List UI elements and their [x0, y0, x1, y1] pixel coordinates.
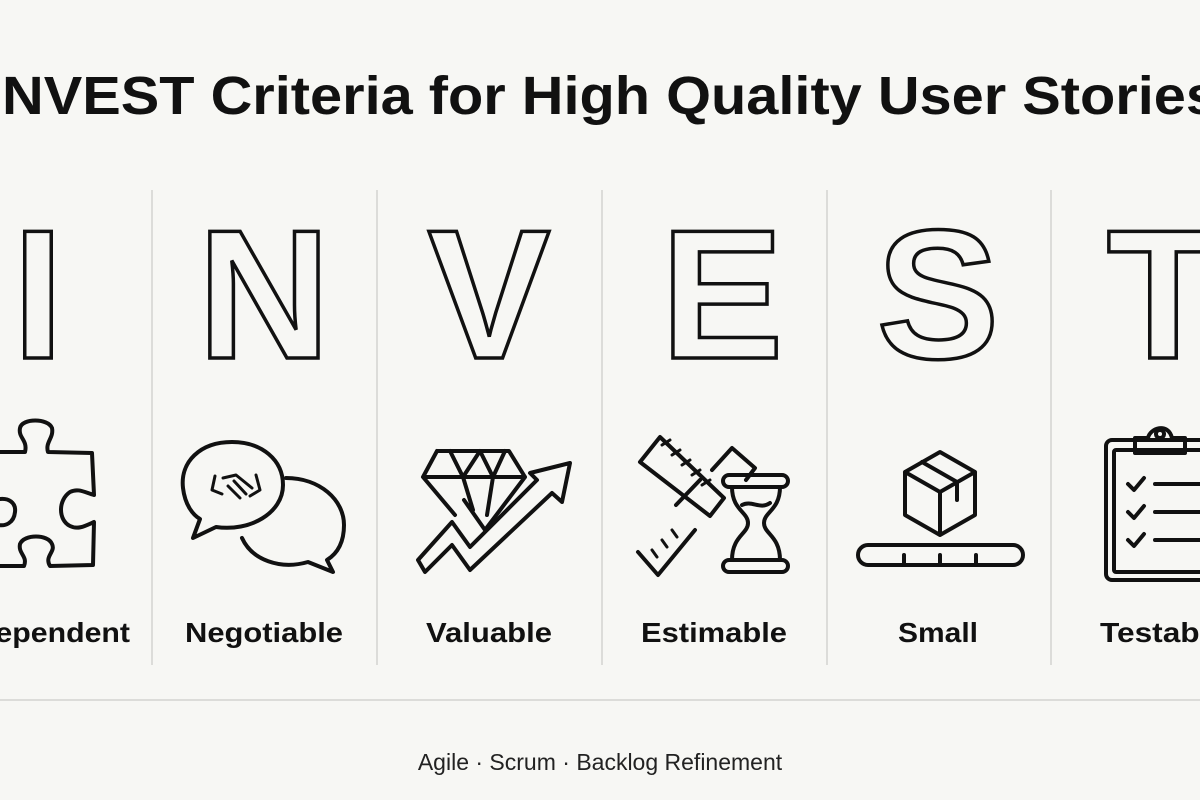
big outlined letters: I: [12, 191, 64, 397]
big outlined letters: S: [877, 191, 999, 397]
big outlined letters: [12, 191, 1200, 397]
icon: puzzle piece: [0, 420, 94, 566]
labels: [0, 617, 1200, 648]
title: INVEST Criteria for High Quality User Stories: [0, 66, 1200, 126]
labels: Small: [898, 617, 978, 648]
icon: clipboard checklist: [1106, 428, 1200, 580]
icon: diamond with arrow: [418, 451, 570, 572]
icon: box on scale: [858, 452, 1023, 565]
icon: rulers and hourglass: [638, 437, 788, 575]
footer: Agile · Scrum · Backlog Refinement: [418, 749, 783, 775]
icon: speech bubbles handshake: [183, 442, 344, 572]
big outlined letters: E: [661, 191, 783, 397]
labels: Valuable: [426, 617, 552, 648]
big outlined letters: V: [428, 191, 550, 397]
big outlined letters: N: [198, 191, 330, 397]
labels: Negotiable: [185, 617, 343, 648]
labels: Estimable: [641, 617, 787, 648]
